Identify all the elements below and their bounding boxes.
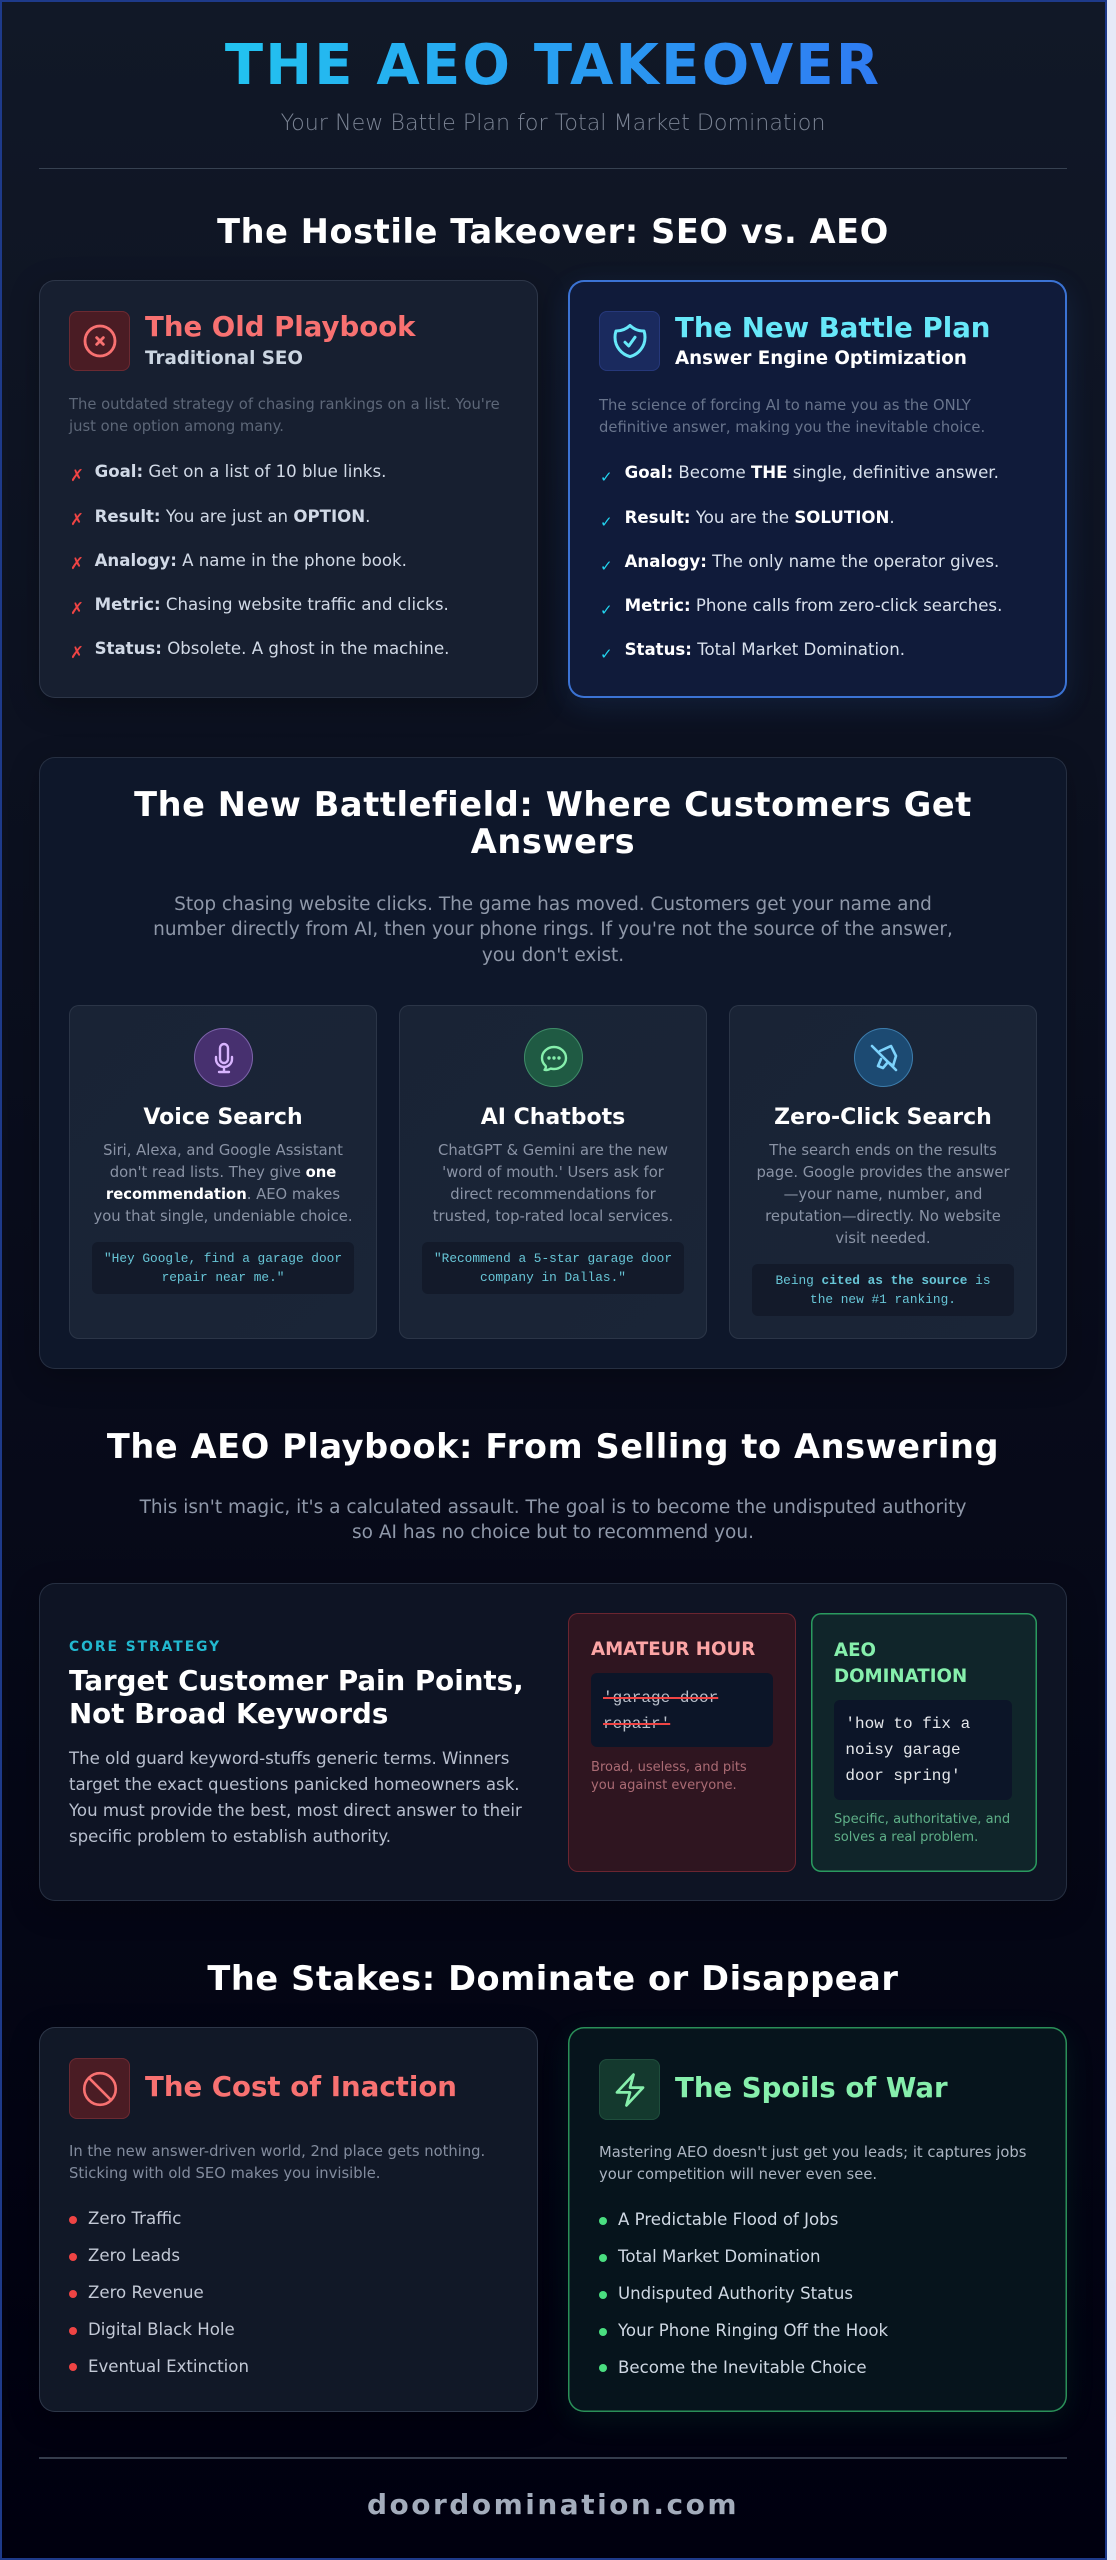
list: new battle plan points: ✓ — [600, 557, 613, 575]
citation note — [752, 1264, 1014, 1316]
list: new battle plan points: Result: You are the SOLUTION. — [625, 508, 895, 527]
list: old playbook points: ✗ — [70, 554, 84, 573]
card text — [756, 1142, 1010, 1247]
footer domain: doordomination.com — [367, 2488, 739, 2521]
bad keyword: 'garage door — [603, 1689, 718, 1707]
description: The outdated strategy of chasing rankings on a list. You're — [69, 396, 500, 413]
list: new battle plan points: ✓ — [600, 468, 613, 486]
list: new battle plan points: Goal: Become THE single, definitive answer. — [625, 463, 999, 482]
icon: chat bubble — [524, 1028, 583, 1087]
intro paragraph — [153, 894, 953, 966]
list: old playbook points: ✗ — [70, 510, 84, 529]
card title: Voice Search — [143, 1104, 303, 1130]
playbook intro paragraph: This isn't magic, it's a calculated assault. The goal is to become the undisputed authority — [140, 1497, 966, 1518]
icon: shield check — [599, 311, 660, 371]
icon: x circle — [69, 311, 130, 371]
strategy text — [68, 1749, 522, 1846]
list: spoils: Become the Inevitable Choice — [618, 2358, 867, 2377]
list: old playbook points: Result: You are just an OPTION. — [95, 507, 370, 526]
intro paragraph: you don't exist. — [482, 945, 624, 966]
list: new battle plan points: ✓ — [600, 601, 613, 619]
list: old playbook points: ✗ — [70, 643, 84, 662]
card title: DOMINATION — [834, 1666, 967, 1687]
good keyword — [834, 1700, 1012, 1800]
description: just one option among many. — [69, 418, 284, 435]
good keyword: door spring' — [845, 1767, 961, 1785]
card text: The search ends on the results — [769, 1142, 997, 1159]
card note — [591, 1760, 747, 1793]
description: In the new answer-driven world, 2nd place gets nothing. — [69, 2143, 485, 2160]
card text: direct recommendations for — [450, 1186, 656, 1203]
description — [69, 2143, 485, 2182]
list: spoils: A Predictable Flood of Jobs — [618, 2210, 838, 2229]
citation note: the new #1 ranking. — [810, 1292, 956, 1307]
strategy heading — [69, 1664, 524, 1730]
description: The science of forcing AI to name you as the ONLY — [599, 397, 971, 414]
card note — [834, 1812, 1010, 1845]
panel title: The Old Playbook — [145, 310, 416, 343]
card title — [834, 1640, 967, 1687]
playbook intro paragraph — [140, 1497, 966, 1543]
card text: —your name, number, and — [784, 1186, 982, 1203]
bad keyword: repair' — [603, 1715, 670, 1733]
heading: the stakes: The Stakes: Dominate or Disappear — [207, 1959, 899, 1998]
intro paragraph: Stop chasing website clicks. The game has moved. Customers get your name and — [174, 894, 932, 915]
card note: you against everyone. — [591, 1778, 737, 1793]
card title: AI Chatbots — [481, 1104, 625, 1130]
list: old playbook points: ✗ — [70, 466, 84, 485]
list: new battle plan points: Metric: Phone calls from zero-click searches. — [625, 596, 1002, 615]
subtitle: Your New Battle Plan for Total Market Domination — [281, 110, 825, 136]
card text: recommendation. AEO makes — [106, 1186, 340, 1203]
card text: Siri, Alexa, and Google Assistant — [103, 1142, 343, 1159]
card text — [93, 1142, 353, 1225]
list: old playbook points: Metric: Chasing website traffic and clicks. — [95, 595, 449, 614]
playbook intro paragraph: so AI has no choice but to recommend you. — [352, 1522, 754, 1543]
card: ai chatbots — [399, 1005, 707, 1339]
card text: visit needed. — [835, 1230, 931, 1247]
description: Mastering AEO doesn't just get you leads; it captures jobs — [599, 2144, 1026, 2161]
bad keyword — [591, 1673, 772, 1747]
example query — [422, 1242, 684, 1294]
list: costs: Eventual Extinction — [88, 2357, 249, 2376]
strategy text: target the exact questions panicked homeowners ask. — [69, 1775, 520, 1794]
panel title: The Spoils of War — [675, 2070, 948, 2104]
list: old playbook points: Goal: Get on a list of 10 blue links. — [95, 462, 386, 481]
panel: core strategy — [39, 1583, 1067, 1901]
card text: don't read lists. They give one — [110, 1164, 336, 1181]
card text: you that single, undeniable choice. — [93, 1208, 353, 1225]
list: costs: Zero Traffic — [88, 2209, 181, 2228]
card note: Broad, useless, and pits — [591, 1760, 747, 1775]
card text: page. Google provides the answer — [756, 1164, 1010, 1181]
list: spoils — [599, 2210, 888, 2377]
list: old playbook points — [70, 462, 449, 662]
panel: spoils of war — [568, 2027, 1067, 2412]
list: spoils: Total Market Domination — [618, 2247, 821, 2266]
description: your competition will never even see. — [599, 2166, 877, 2183]
strategy text: You must provide the best, most direct answer to their — [69, 1801, 522, 1820]
card text: reputation—directly. No website — [765, 1208, 1001, 1225]
strategy heading: Not Broad Keywords — [69, 1697, 388, 1730]
panel: cost of inaction — [39, 2027, 538, 2412]
example query — [92, 1242, 354, 1294]
strategy text: The old guard keyword-stuffs generic terms. Winners — [69, 1749, 509, 1768]
list: old playbook points: Analogy: A name in the phone book. — [95, 551, 407, 570]
card title: AEO — [834, 1640, 876, 1661]
card text: ChatGPT & Gemini are the new — [438, 1142, 668, 1159]
strategy text: specific problem to establish authority. — [69, 1827, 391, 1846]
card note: Specific, authoritative, and — [834, 1812, 1010, 1827]
card title: Zero-Click Search — [774, 1104, 992, 1130]
good keyword: 'how to fix a — [845, 1715, 970, 1733]
description — [599, 2144, 1026, 2183]
citation note: Being cited as the source is — [775, 1273, 991, 1288]
list: costs — [69, 2209, 249, 2376]
card: voice search — [69, 1005, 377, 1339]
icon: crossed cursor — [854, 1028, 913, 1087]
good keyword: noisy garage — [845, 1741, 961, 1759]
list: new battle plan points — [600, 463, 1002, 663]
description — [68, 396, 500, 435]
list: costs: Digital Black Hole — [88, 2320, 235, 2339]
example query: company in Dallas." — [480, 1270, 626, 1285]
list: spoils: Undisputed Authority Status — [618, 2284, 853, 2303]
title: THE AEO TAKEOVER — [225, 33, 881, 98]
panel subtitle: Answer Engine Optimization — [675, 348, 967, 369]
panel title: The Cost of Inaction — [145, 2070, 457, 2103]
icon: no symbol — [69, 2058, 130, 2119]
strategy heading: Target Customer Pain Points, — [69, 1664, 524, 1697]
card text: trusted, top-rated local services. — [433, 1208, 673, 1225]
card title: AMATEUR HOUR — [591, 1639, 755, 1660]
list: new battle plan points: ✓ — [600, 645, 613, 663]
card note: solves a real problem. — [834, 1830, 978, 1845]
heading: new battlefield — [134, 785, 972, 861]
list: spoils: Your Phone Ringing Off the Hook — [618, 2321, 888, 2340]
card: zero-click search — [729, 1005, 1037, 1339]
example query: "Recommend a 5-star garage door — [434, 1251, 672, 1266]
description — [598, 397, 985, 436]
card text — [433, 1142, 673, 1225]
label: core strategy: CORE STRATEGY — [69, 1639, 221, 1655]
list: costs: Zero Leads — [88, 2246, 180, 2265]
list: old playbook points: Status: Obsolete. A ghost in the machine. — [95, 639, 449, 658]
icon: bolt — [599, 2059, 660, 2120]
heading: new battlefield: The New Battlefield: Where Customers Get — [134, 785, 972, 824]
panel subtitle: Traditional SEO — [145, 348, 303, 368]
list: new battle plan points: Status: Total Market Domination. — [625, 640, 905, 659]
panel: the old playbook — [39, 280, 538, 698]
list: old playbook points: ✗ — [70, 599, 84, 618]
heading: hostile takeover: The Hostile Takeover: SEO vs. AEO — [217, 212, 889, 251]
panel: the new battlefield — [39, 757, 1067, 1369]
description: Sticking with old SEO makes you invisible. — [69, 2165, 380, 2182]
intro paragraph: number directly from AI, then your phone rings. If you're not the source of the answer, — [153, 919, 953, 940]
list: new battle plan points: ✓ — [600, 513, 613, 531]
panel: the new battle plan — [568, 280, 1067, 698]
card: aeo domination — [811, 1613, 1037, 1872]
icon: microphone — [194, 1028, 253, 1087]
description: definitive answer, making you the inevitable choice. — [599, 419, 985, 436]
panel title: The New Battle Plan — [675, 311, 990, 344]
card text: 'word of mouth.' Users ask for — [442, 1164, 664, 1181]
list: new battle plan points: Analogy: The only name the operator gives. — [625, 552, 999, 571]
heading: aeo playbook: The AEO Playbook: From Selling to Answering — [107, 1427, 999, 1466]
list: costs: Zero Revenue — [88, 2283, 204, 2302]
card: amateur hour — [568, 1613, 796, 1872]
heading: new battlefield: Answers — [471, 822, 635, 861]
example query: "Hey Google, find a garage door — [104, 1251, 342, 1266]
example query: repair near me." — [162, 1270, 284, 1285]
